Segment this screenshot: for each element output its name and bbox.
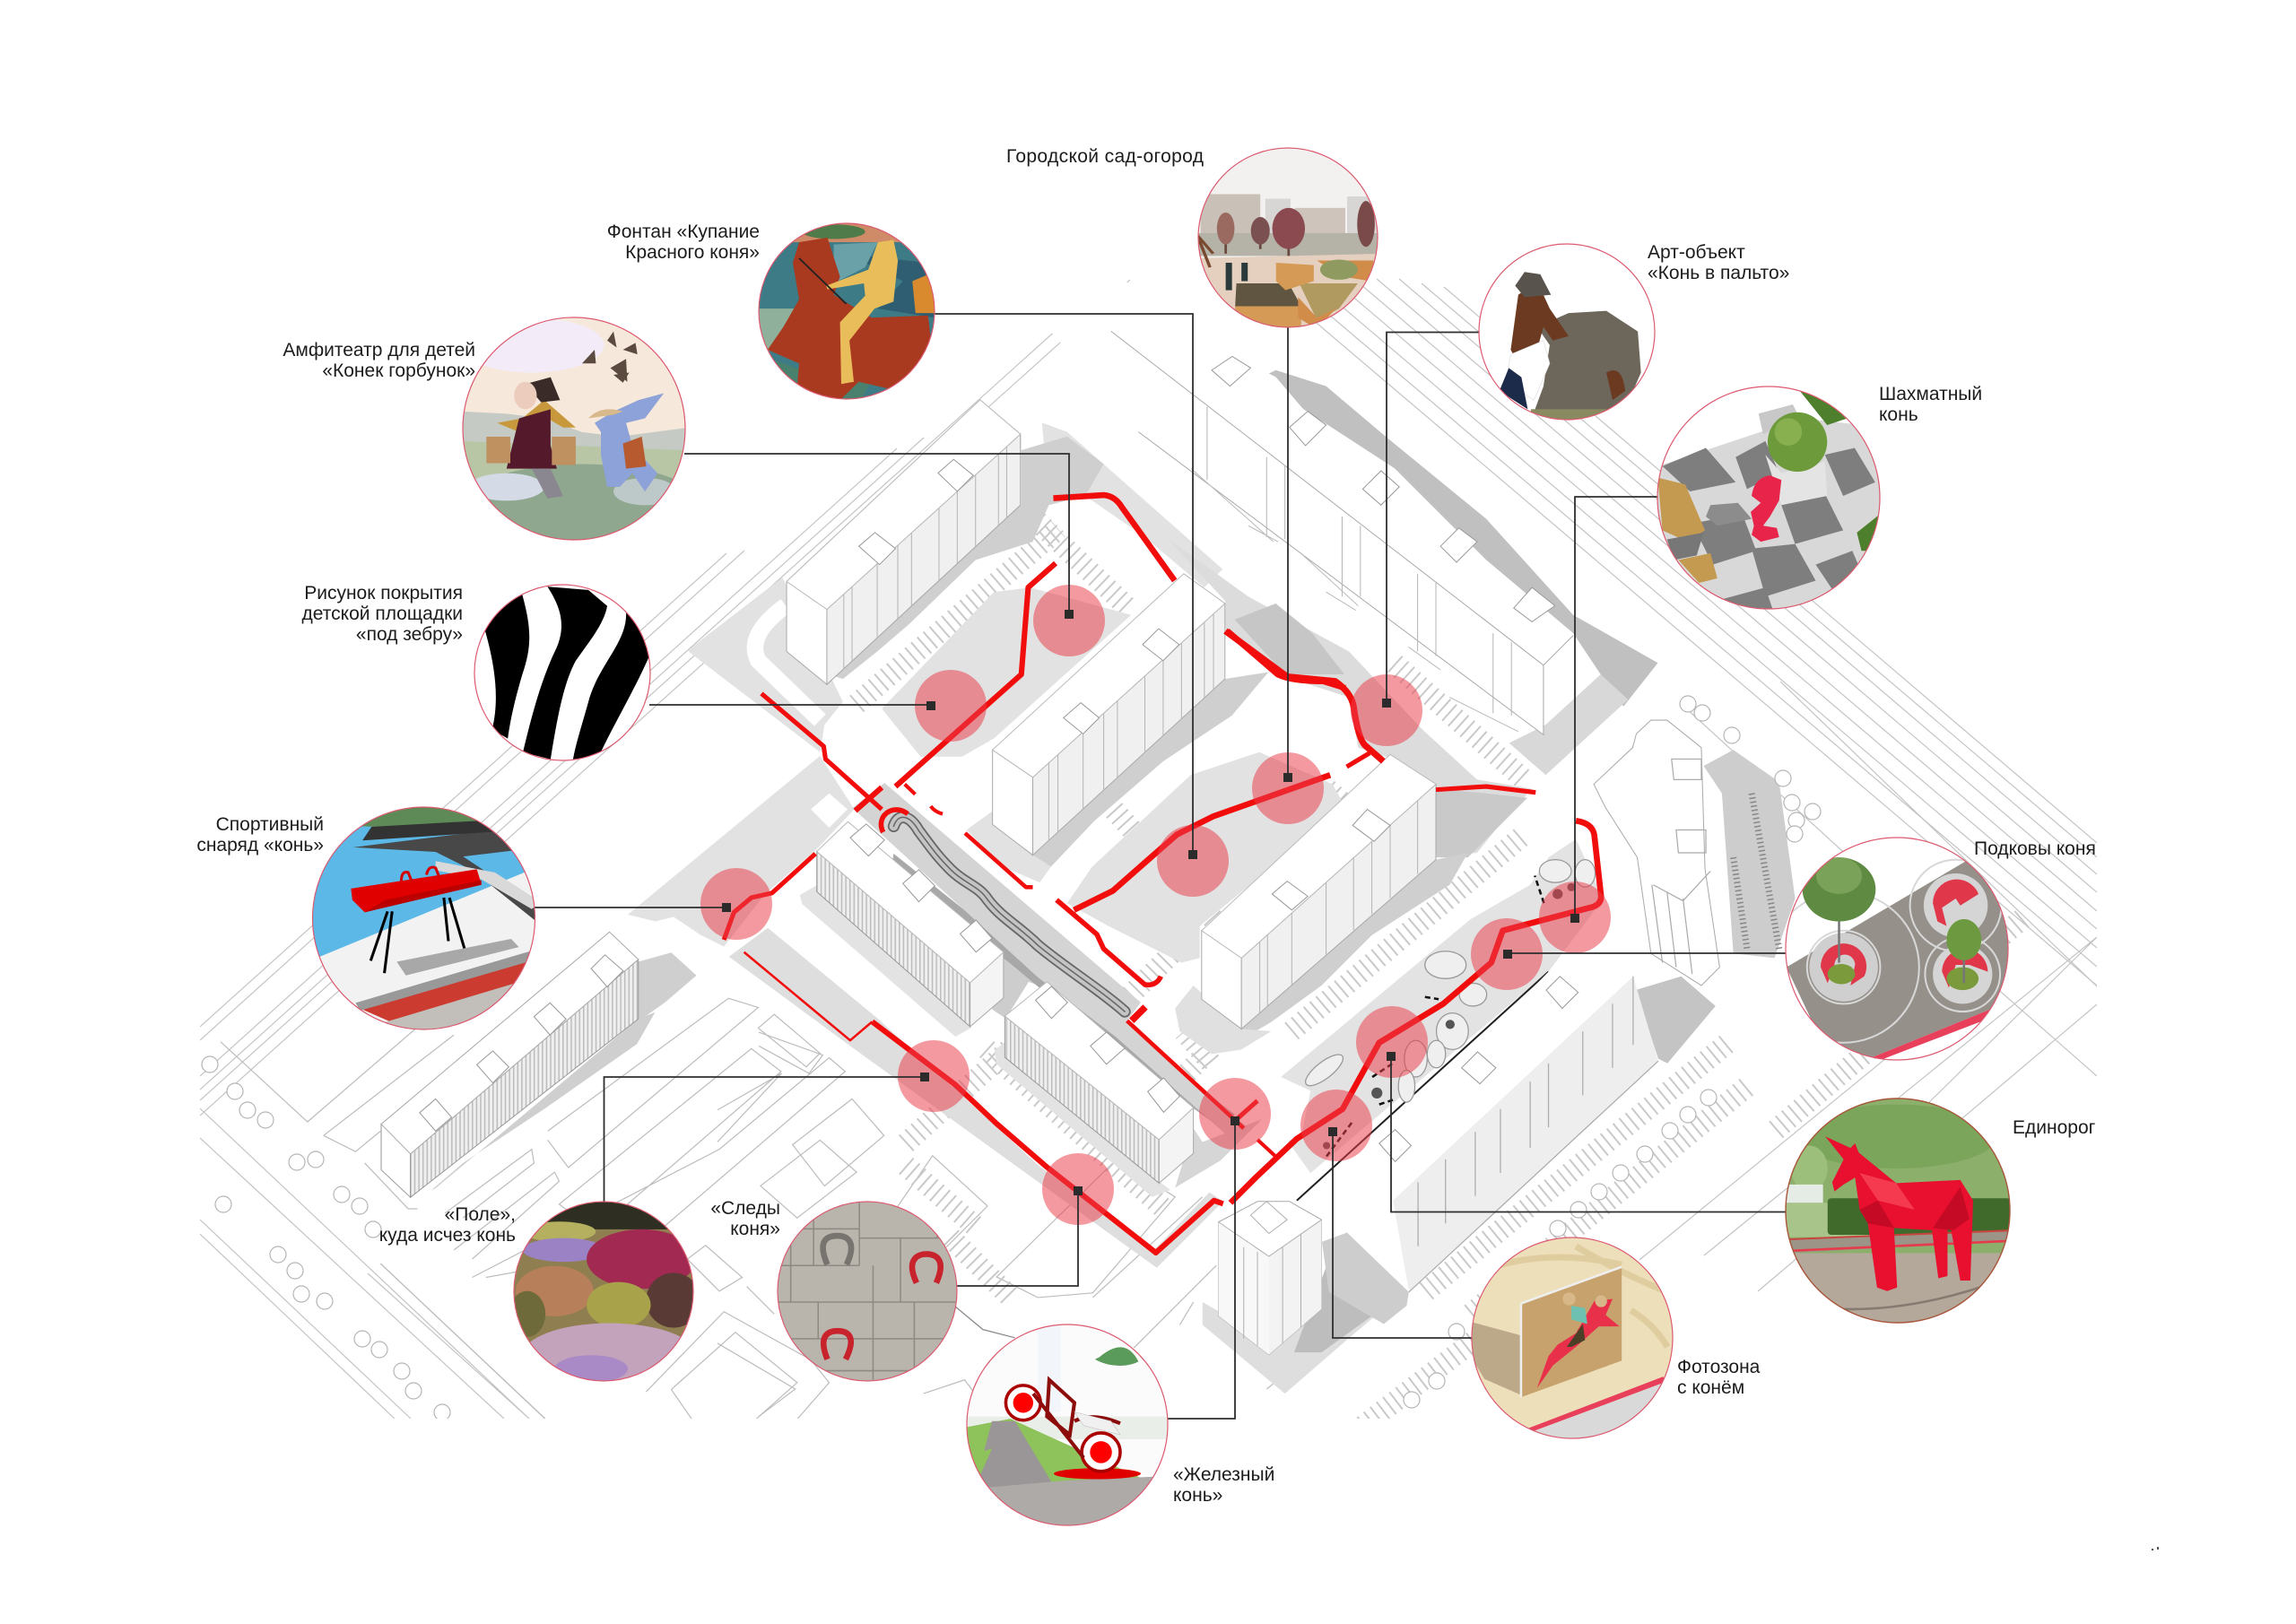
buildings: twin hatched blocks (817, 821, 1194, 1183)
label: fountain (607, 221, 760, 263)
building: north-east long block (1047, 267, 1573, 734)
image circle: iron horse (962, 1320, 1173, 1531)
image circle: flower field (513, 1201, 694, 1382)
building: central tower block (993, 574, 1225, 855)
image circle: amphitheatre (462, 317, 686, 541)
label: zebra surface: «под зебру» (356, 624, 463, 645)
route: east section (1231, 821, 1601, 1203)
building: south-east slab (1347, 972, 1658, 1292)
east courtyard ground (1166, 370, 1796, 1055)
label: photo zone: с конём (1677, 1377, 1744, 1398)
road linework (200, 279, 2097, 1419)
label: amphitheatre (283, 340, 475, 381)
label: zebra surface (302, 583, 463, 645)
playground band (1281, 839, 1716, 1324)
label: field: куда исчез конь (379, 1225, 516, 1246)
image circle: red horse painting (752, 220, 941, 403)
highlight zones on the map (700, 585, 1611, 1225)
label: amphitheatre: Амфитеатр для детей (283, 340, 475, 360)
image circle: horseshoe planters (1785, 837, 2009, 1061)
label: field (379, 1204, 516, 1246)
label: photo zone (1677, 1357, 1761, 1398)
building: south-west block (381, 932, 697, 1197)
label: fountain: Красного коня» (625, 242, 760, 263)
label: unicorn: Единорог (2013, 1117, 2096, 1138)
image circle: horse in coat (1474, 240, 1663, 423)
label: art object (1648, 242, 1789, 283)
label: field: «Поле», (445, 1204, 516, 1225)
label: iron horse (1173, 1464, 1274, 1506)
label: sports apparatus: Спортивный (216, 814, 324, 835)
label: chess knight: Шахматный (1879, 384, 1982, 404)
walking route in red (724, 495, 1601, 1253)
image circle: red unicorn (1782, 1095, 2015, 1331)
image circle: pommel horse (308, 802, 541, 1039)
label: art object: Арт-объект (1648, 242, 1745, 263)
label: chess knight (1879, 384, 1982, 425)
label: urban garden: Городской сад-огород (1006, 146, 1204, 167)
label: zebra surface: детской площадки (302, 604, 463, 624)
image circle: urban garden (1195, 143, 1383, 332)
label: art object: «Конь в пальто» (1648, 263, 1789, 283)
image circle: photo zone (1466, 1232, 1676, 1443)
courtyard and street ground (628, 422, 1345, 962)
lower middle block linework (718, 1031, 1274, 1417)
label: sports apparatus (196, 814, 324, 855)
label: photo zone: Фотозона (1677, 1357, 1761, 1377)
route: north-east section (1225, 631, 1535, 793)
building: eastern tower block (1202, 754, 1436, 1029)
site plan base map (200, 267, 2097, 1426)
parking stripes (857, 516, 2027, 1426)
building: southern tower (1219, 1202, 1321, 1355)
lower block linework (221, 998, 884, 1420)
building: east tower (1594, 720, 1779, 986)
building: north-west tower block (787, 400, 1021, 684)
label: iron horse: конь» (1173, 1485, 1222, 1506)
route: north-west section (724, 495, 1345, 985)
image circle: horseshoe tracks (775, 1199, 960, 1385)
label: fountain: Фонтан «Купание (607, 221, 760, 242)
route: south section (744, 952, 1274, 1253)
trees (202, 696, 1821, 1420)
image circle: chess knight (1651, 382, 1884, 620)
label: amphitheatre: «Конек горбунок» (322, 360, 475, 381)
central strip and street (729, 783, 1404, 1394)
label: chess knight: конь (1879, 404, 1918, 425)
label: iron horse: «Железный (1173, 1464, 1274, 1485)
label: horse tracks: «Следы (710, 1198, 780, 1219)
label: sports apparatus: снаряд «конь» (196, 835, 324, 855)
label: zebra surface: Рисунок покрытия (304, 583, 463, 604)
label: horseshoes: Подковы коня (1974, 838, 2096, 859)
label: horse tracks (710, 1198, 780, 1239)
image circle: zebra pattern (469, 581, 657, 764)
leader lines with markers (535, 314, 1787, 1419)
label: horse tracks: коня» (730, 1219, 780, 1239)
